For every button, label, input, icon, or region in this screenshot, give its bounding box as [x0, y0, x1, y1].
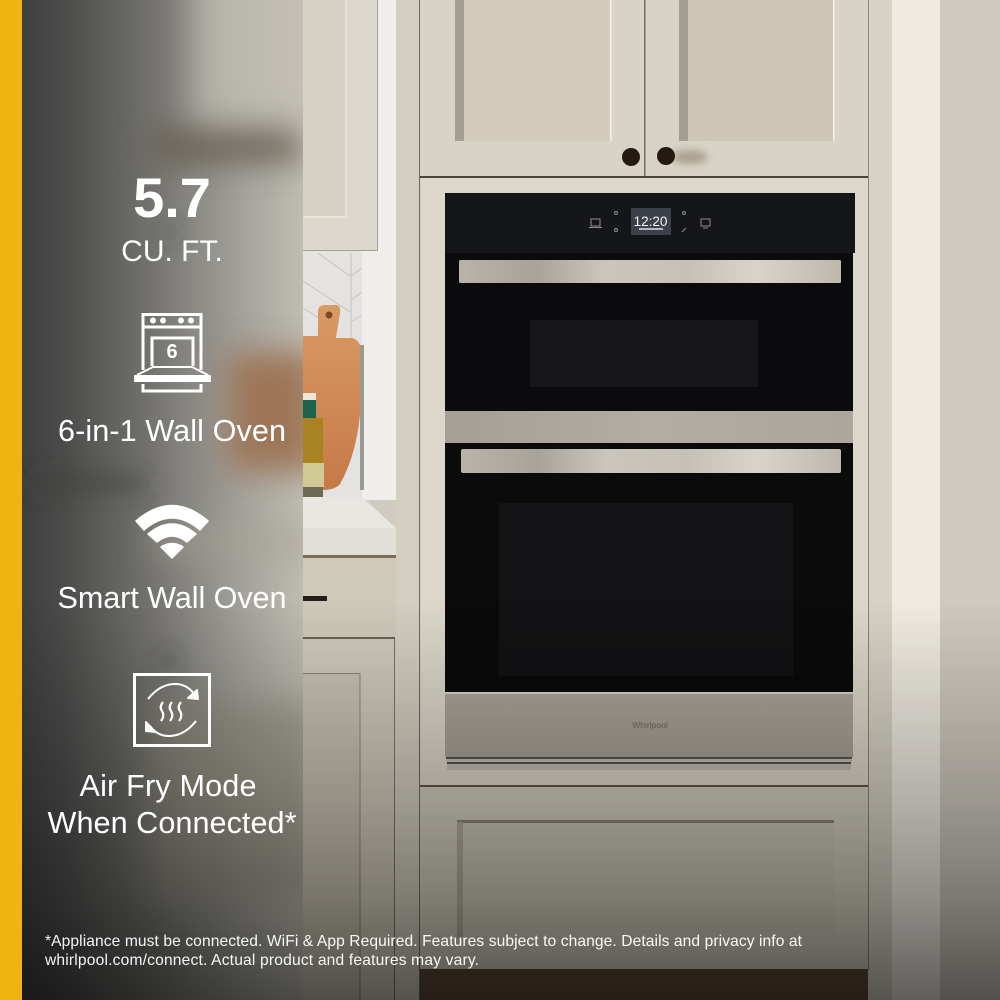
counter top: [303, 497, 396, 558]
tall oven cabinet: [396, 0, 892, 1000]
label: air fry mode: [48, 769, 297, 840]
backsplash tile: [303, 253, 362, 340]
oven surround: [421, 178, 868, 785]
footnote: [44, 933, 803, 969]
display: [631, 208, 671, 235]
bottom drawer: [420, 785, 868, 1000]
cabinet knobs: [622, 147, 708, 166]
oven steel base: [445, 692, 853, 757]
left cabinetry and counter: [303, 0, 420, 1000]
drawer: [303, 558, 395, 639]
icon: wifi: [136, 506, 208, 558]
yellow accent bar: [0, 0, 22, 1000]
bottom shade: [0, 600, 1000, 1000]
capacity stat: 5.7: [133, 166, 211, 229]
label: 6-in-1 wall oven: 6-in-1 Wall Oven: [58, 414, 286, 448]
control icons: [589, 212, 710, 232]
steel divider: [445, 411, 853, 443]
label: air fry mode: When Connected*: [48, 806, 297, 840]
lower handle: [461, 449, 841, 473]
upper handle: [459, 260, 841, 283]
label: air fry mode: Air Fry Mode: [80, 769, 256, 803]
upper cabinet doors: [420, 0, 868, 178]
cutting board: [303, 305, 362, 490]
icon: oven: 6: [166, 341, 178, 363]
oil bottle: [303, 393, 324, 500]
upper oven door: [445, 253, 853, 411]
oven control panel: [445, 193, 855, 253]
capacity stat: [121, 166, 223, 268]
frosted side panel: [22, 0, 303, 1000]
brand logo: Whirlpool: [632, 720, 668, 730]
icon: oven: [134, 314, 211, 391]
label: smart wall oven: Smart Wall Oven: [58, 581, 286, 615]
footnote: *Appliance must be connected. WiFi & App Required. Features subject to change. Details and privacy info at: [45, 933, 803, 950]
upper wall cabinet: [303, 0, 378, 251]
footnote: whirlpool.com/connect. Actual product and features may vary.: [44, 952, 479, 969]
lower cabinet door: [303, 639, 395, 1000]
side pilaster: [396, 0, 420, 1000]
oven vent: [446, 757, 852, 770]
lower oven door: [445, 443, 853, 692]
display: 12:20: [634, 214, 667, 229]
icon: air fry: [134, 674, 210, 746]
capacity stat: CU. FT.: [121, 235, 223, 268]
